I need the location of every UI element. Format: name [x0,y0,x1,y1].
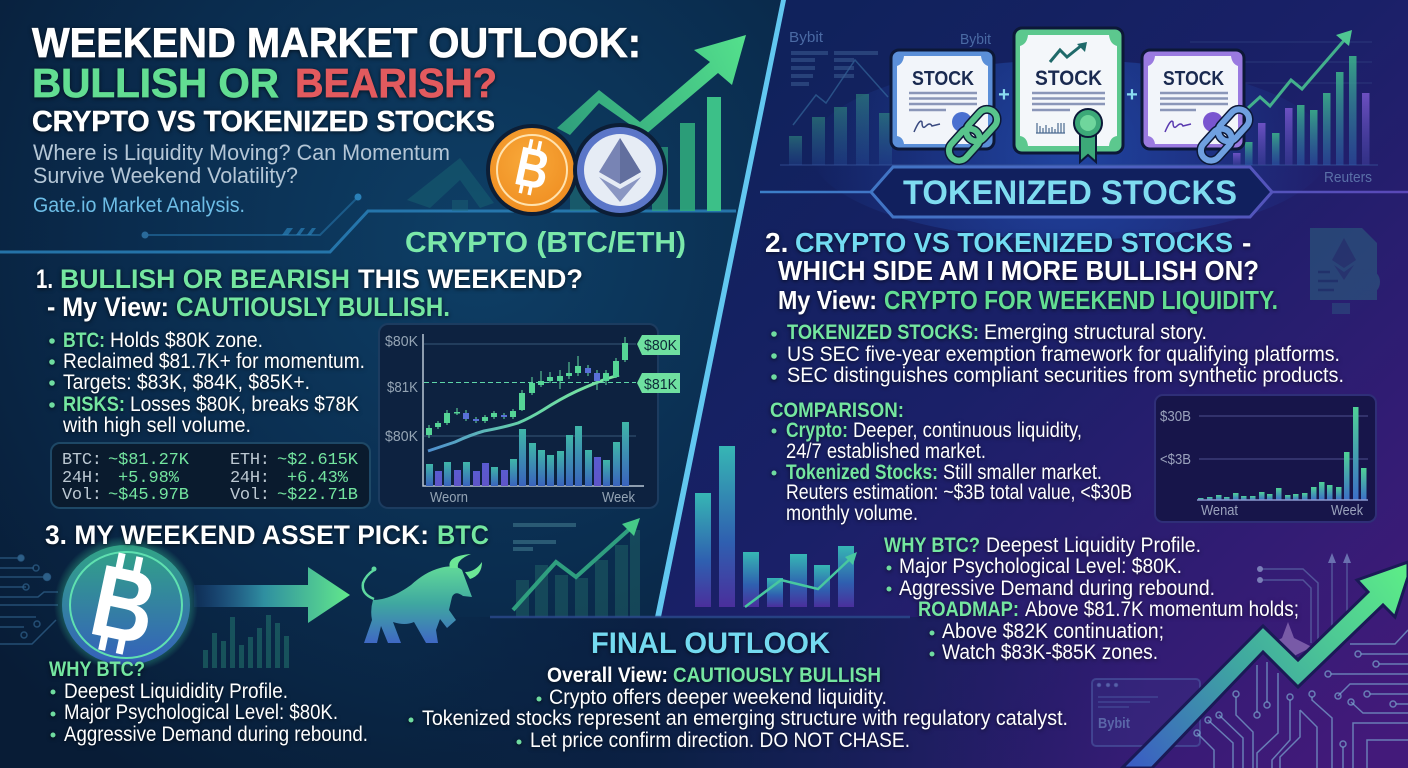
section 2 heading [765,227,1278,315]
title block: WEEKEND MARKET OUTLOOK: [32,19,641,66]
browser window decoration [1092,679,1200,746]
section 1 bullets: Losses $80K, breaks $78K [130,393,359,416]
market size bar chart panel [1155,395,1376,522]
why btc right block: Aggressive Demand during rebound. [899,577,1215,600]
background glow [810,60,1330,240]
stats box: +6.43% [287,469,349,488]
section 2 bullets: TOKENIZED STOCKS: [787,321,979,344]
stats box: ~$22.71B [277,486,358,505]
icon: bitcoin coin: B [510,134,555,202]
stats box: 24H: [230,469,270,488]
market size bar chart panel: Wenat [1201,502,1239,519]
section 2 heading: My View: [778,285,877,315]
circuit lines bottom right [1194,553,1408,768]
subtitle: Where is Liquidity Moving? Can Momentum [33,140,450,165]
stock certificate: green: STOCK [1035,67,1102,90]
final outlook block: Overall View: [547,664,668,687]
comparison block: 24/7 established market. [786,440,986,463]
background chart top right: Bybit [789,29,824,46]
title block: BEARISH? [295,60,497,106]
section 2 bullets: Emerging structural story. [984,321,1207,344]
circuit lines top left [0,194,736,252]
section 1 bullets: BTC: [63,329,105,352]
why btc left block [49,658,368,746]
comparison block [770,399,1132,525]
final outlook block [408,627,1068,752]
stats box: ~$81.27K [108,451,190,470]
stats box: BTC: [62,451,102,470]
comparison block: Crypto: [786,419,848,442]
section 3 heading: 3. MY WEEKEND ASSET PICK: [45,520,429,550]
stats box: ~$2.615K [277,451,359,470]
section 1 heading [36,264,583,322]
section 1 bullets [49,329,365,437]
why btc right block: Above $81.7K momentum holds; [1025,598,1299,621]
source note: Gate.io Market Analysis. [33,194,245,217]
candlestick chart panel: $80K [385,333,418,350]
why btc left block: Deepest Liquididity Profile. [64,680,288,703]
why btc left block: Aggressive Demand during rebound. [64,723,368,746]
why btc left block: WHY BTC? [49,658,145,681]
candlestick chart panel: $81K [387,379,418,396]
why btc left block: Major Psychological Level: $80K. [64,701,338,724]
stock certificate: blue: STOCK [912,68,974,90]
final outlook block: Tokenized stocks represent an emerging structure with regulatory catalyst. [422,707,1068,730]
section 2 heading: WHICH SIDE AM I MORE BULLISH ON? [778,255,1259,286]
chart decoration behind coins [407,97,721,211]
section 2 heading: CRYPTO VS TOKENIZED STOCKS [795,227,1233,258]
icon: bull [363,554,482,643]
background chart top right [780,29,1378,186]
title block [32,19,641,138]
why btc right block: Watch $83K-$85K zones. [942,641,1158,664]
why btc right block: WHY BTC? [884,534,980,557]
why btc right block: Deepest Liquidity Profile. [986,534,1201,557]
final outlook block: CAUTIOUSLY BULLISH [673,664,881,687]
icon: ethereum coin [573,123,667,217]
heading: crypto column: CRYPTO (BTC/ETH) [405,227,686,259]
market size bar chart panel: Week [1331,502,1363,519]
final outlook block: Let price confirm direction. DO NOT CHASE. [530,729,910,752]
background chart top right: Reuters [1324,169,1372,186]
price tag: $81K [637,373,680,393]
moving average line [428,375,619,451]
price tag: $80K [637,335,680,355]
section 2 bullets: US SEC five-year exemption framework for qualifying platforms. [787,343,1340,366]
price tag: $81K: $81K [644,376,677,393]
background chart top right: Bybit [960,31,992,48]
subtitle: Survive Weekend Volatility? [33,163,298,188]
browser window decoration: Bybit [1098,715,1130,732]
stats box: 24H: [62,469,102,488]
volume bars [426,422,629,486]
background: tokenized stocks side [658,0,1408,768]
section 1 heading: THIS WEEKEND? [358,264,583,294]
icon: large bitcoin coin [54,536,198,672]
icon: document with ethereum [1310,228,1378,314]
arrow: large rising trend [1122,562,1408,768]
section 1 heading: BULLISH OR BEARISH [60,264,350,294]
market size bar chart panel: <$3B [1160,451,1191,468]
stock certificate: blue [891,50,994,149]
icon: green chain link [945,105,1001,165]
section 2 bullets [771,321,1344,387]
section 1 bullets: with high sell volume. [62,414,251,437]
candles [426,337,628,438]
stats box: +5.98% [118,469,180,488]
stats box: ETH: [230,451,270,470]
small bars decoration [203,615,289,668]
icon: blue chain link [1197,105,1253,165]
stats box [51,443,370,508]
subtitle [33,140,450,188]
stock certificate: green [1014,28,1123,162]
heading banner: tokenized stocks: TOKENIZED STOCKS [903,174,1237,212]
why btc right block: ROADMAP: [918,598,1019,621]
why btc right block [884,534,1299,664]
candlestick chart panel: Week [602,489,635,506]
section 3 heading: BTC [437,520,489,550]
arrow: coin to bull [194,567,350,623]
centre bar chart with arrow [695,446,857,607]
section 1 heading: - My View: [47,292,169,322]
section 1 bullets: Holds $80K zone. [110,329,263,352]
candlestick chart panel: Weorn [430,489,468,506]
why btc right block: Major Psychological Level: $80K. [899,555,1182,578]
stock certificate: purple [1142,50,1244,149]
stats box: ~$45.97B [108,486,189,505]
section 1 heading: CAUTIOUSLY BULLISH. [176,292,450,322]
final outlook block: FINAL OUTLOOK [591,627,830,660]
comparison block: Still smaller market. [943,461,1102,484]
icon: large bitcoin coin: B [82,543,166,667]
section 2 heading: CRYPTO FOR WEEKEND LIQUIDITY. [884,285,1278,315]
background: bottom centre band [400,617,1150,768]
section 1 bullets: Reclaimed $81.7K+ for momentum. [63,350,365,373]
section 1 bullets: Targets: $83K, $84K, $85K+. [63,371,310,394]
divider diagonal [655,0,786,617]
candlestick chart panel [379,324,680,508]
comparison block: Reuters estimation: ~$3B total value, <$30B [786,481,1132,504]
title block: CRYPTO VS TOKENIZED STOCKS [32,106,495,138]
plus sign: + [998,84,1010,106]
stats box: Vol: [62,486,102,505]
why btc right block: Above $82K continuation; [942,620,1164,643]
section 1 bullets: RISKS: [63,393,125,416]
icon: bitcoin coin [486,124,578,216]
arrow: rising green trend [557,35,746,135]
circuit lines left [0,555,58,644]
comparison block: monthly volume. [786,502,918,525]
divider bottom line [490,616,910,618]
candlestick chart panel: $80K [385,428,418,445]
section 2 heading: - [1242,227,1251,258]
comparison block: COMPARISON: [770,399,904,422]
comparison block: Tokenized Stocks: [786,461,938,484]
sheen star [1266,622,1312,668]
section 1 heading: 1. [36,264,53,294]
section 2 heading: 2. [765,227,788,258]
heading banner: tokenized stocks [760,167,1408,217]
comparison block: Deeper, continuous liquidity, [853,419,1082,442]
price tag: $80K: $80K [644,337,677,354]
plus sign: + [1126,84,1138,106]
stock certificate: purple: STOCK [1163,68,1224,90]
title block: BULLISH OR [32,60,279,106]
stats box: Vol: [230,486,270,505]
chart decoration bottom centre-left [513,518,640,617]
market size bar chart panel: $30B [1160,408,1191,425]
section 2 bullets: SEC distinguishes compliant securities from synthetic products. [787,364,1344,387]
final outlook block: Crypto offers deeper weekend liquidity. [549,686,887,709]
